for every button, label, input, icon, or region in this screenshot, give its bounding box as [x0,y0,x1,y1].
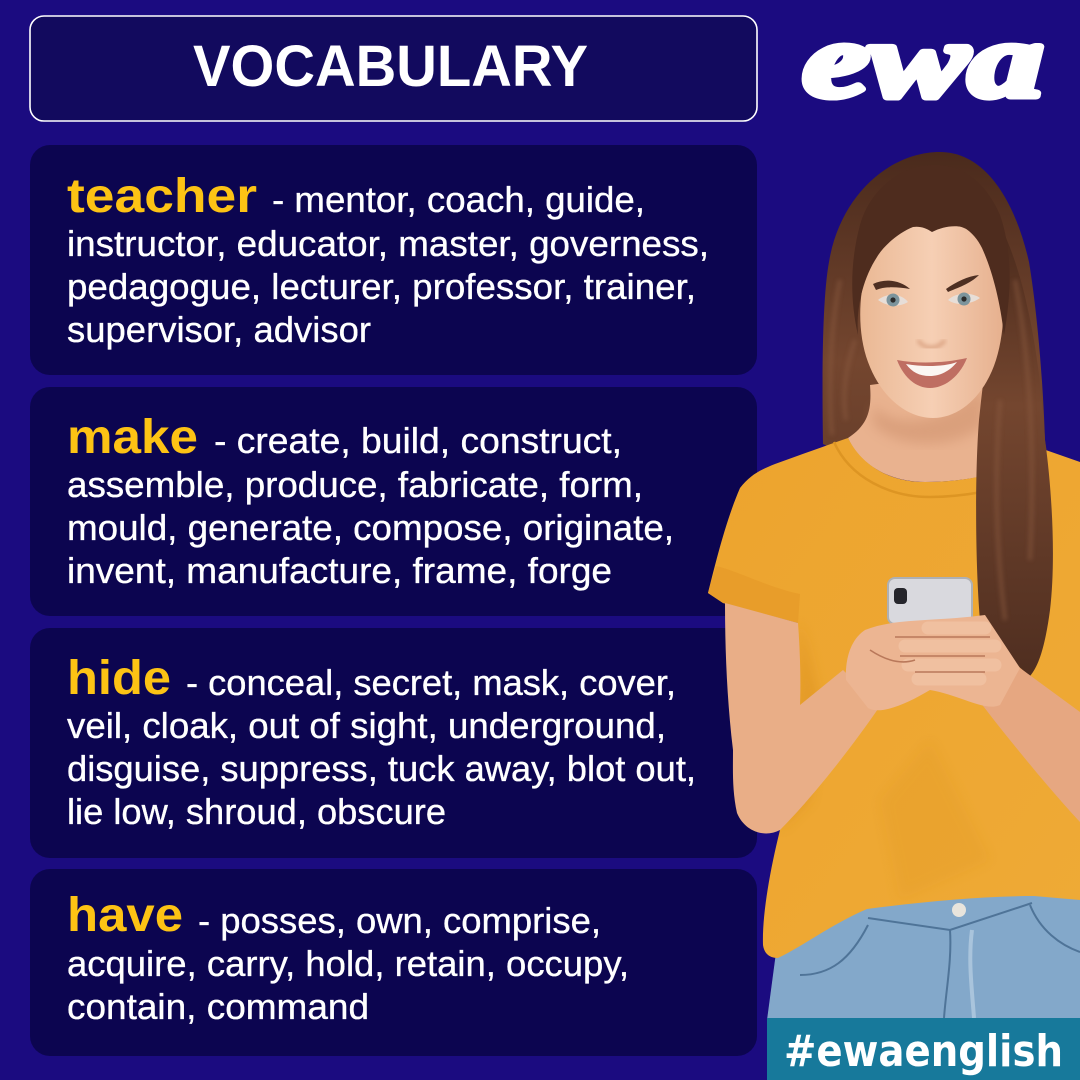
shirt [708,438,1080,958]
right strand of hair [976,225,1053,676]
synonyms: have: contain, command [67,986,369,1027]
jeans waistband details [800,903,1080,1018]
nose [918,340,945,348]
phone camera [894,588,907,604]
synonyms: hide: lie low, shroud, obscure [67,791,446,832]
word: make: make [67,411,198,464]
phone [888,578,972,624]
synonyms: hide: veil, cloak, out of sight, underground, [67,705,666,746]
collar [834,442,982,497]
title box [30,16,757,121]
left arm [725,603,880,833]
synonyms: have: - posses, own, comprise, [198,900,601,941]
hair light streaks [830,280,1032,620]
synonyms: teacher [67,179,709,350]
synonyms: have [67,900,629,1027]
synonyms: hide: - conceal, secret, mask, cover, [186,662,676,703]
synonyms: make: invent, manufacture, frame, forge [67,550,612,591]
synonyms: make [67,420,674,591]
panel: hide [30,628,757,858]
jeans [767,870,1080,1020]
neck [848,370,984,482]
shirt shading [780,620,990,900]
logo: ewa: ewa [803,2,1043,119]
word: teacher: teacher [67,170,257,223]
mouth [897,358,967,388]
synonyms: make: - create, build, construct, [214,420,622,461]
panel: make [30,387,757,616]
jeans button [952,903,966,917]
word: have: have [67,889,183,942]
title box: VOCABULARY [193,34,588,99]
panel: teacher [30,145,757,375]
word: hide: hide [67,652,171,705]
synonyms: make: mould, generate, compose, originate, [67,507,674,548]
hands [846,615,1020,710]
synonyms: have: acquire, carry, hold, retain, occupy, [67,943,629,984]
synonyms: teacher: instructor, educator, master, governess, [67,223,709,264]
hairline cap [852,165,1010,335]
panel: have [30,869,757,1056]
synonyms: hide [67,662,696,832]
hair back [823,152,1053,676]
illustration: woman with phone [708,152,1080,1020]
right arm [977,668,1080,822]
sleeve hem [708,566,800,623]
synonyms: teacher: supervisor, advisor [67,309,371,350]
synonyms: hide: disguise, suppress, tuck away, blot out, [67,748,696,789]
face [860,222,1003,418]
neck shadow [873,385,985,444]
synonyms: teacher: - mentor, coach, guide, [272,179,645,220]
eyes [878,292,980,306]
synonyms: teacher: pedagogue, lecturer, professor, trainer, [67,266,696,307]
synonyms: make: assemble, produce, fabricate, form, [67,464,643,505]
eyebrows [873,275,979,292]
